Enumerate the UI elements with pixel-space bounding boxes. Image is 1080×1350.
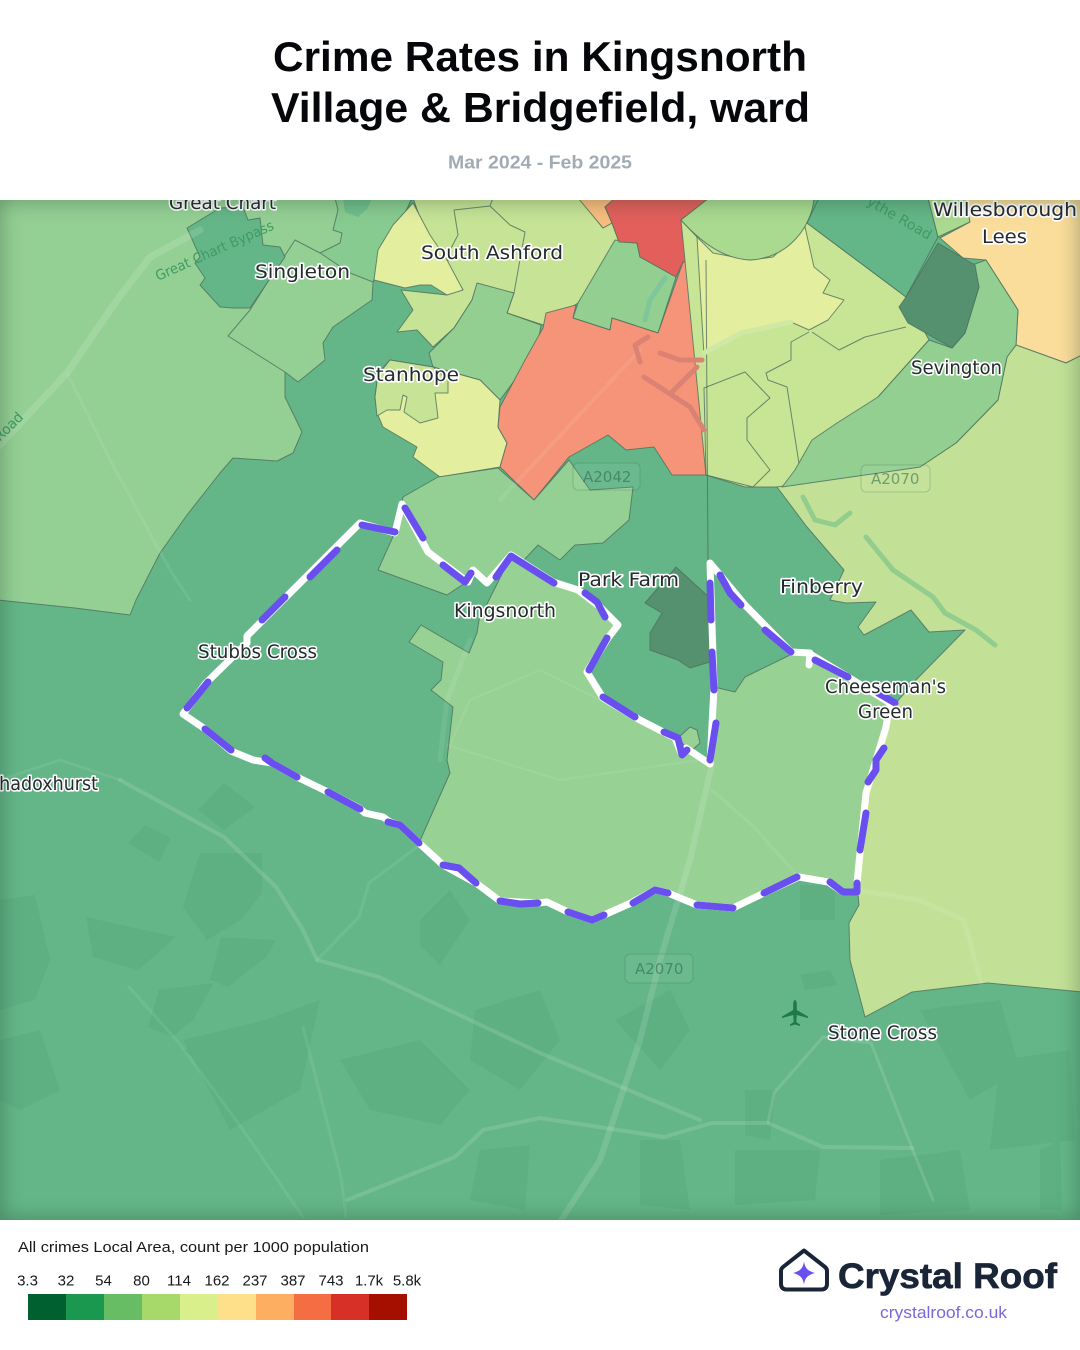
map region: Kingsnorth central light ward bbox=[409, 556, 890, 920]
map region: Great Chart ward bbox=[187, 207, 285, 308]
map detail: roads in peach ward bbox=[635, 337, 704, 430]
label: Lees: Lees bbox=[982, 226, 1027, 248]
map region: South Ashford wards bbox=[397, 198, 619, 347]
logo url: crystalroof.co.uk bbox=[880, 1303, 1008, 1322]
map detail: main roads bbox=[0, 230, 981, 1222]
legend scale values: 1.7k bbox=[355, 1272, 384, 1290]
map region: light green ward north of peach bbox=[573, 240, 676, 333]
road shield: A2070 east: A2070 bbox=[871, 470, 919, 488]
map region: high crime ward, peach bbox=[498, 260, 706, 500]
map region: Park Farm low crime ward bbox=[645, 567, 710, 668]
logo: Crystal Roof bbox=[781, 1250, 1057, 1322]
title bbox=[271, 33, 810, 131]
road name: Hythe Road: ythe Road bbox=[864, 194, 934, 243]
label: Stubbs Cross: Stubbs Cross bbox=[198, 641, 317, 663]
map region: South Ashford pale ward bbox=[374, 203, 463, 295]
road shield: A2070 south bbox=[625, 954, 693, 983]
map region: low crime dark ward, Sevington bbox=[899, 243, 979, 348]
road name: Great Chart Bypass: Great Chart Bypass bbox=[153, 218, 277, 285]
map detail: rivers bbox=[645, 278, 995, 645]
map panel bbox=[0, 192, 1080, 1222]
subtitle: date range: Mar 2024 - Feb 2025 bbox=[448, 152, 632, 172]
legend scale values: 743 bbox=[318, 1272, 344, 1290]
map region: Singleton upper ward bbox=[320, 198, 412, 282]
map region: Stanhope inner ward bbox=[375, 360, 448, 423]
map region: Kingsnorth upper light ward bbox=[378, 460, 633, 595]
label: Sevington: Sevington bbox=[911, 357, 1002, 379]
map region: Sevington ward bbox=[782, 260, 1018, 487]
map region: western ward, light green bbox=[0, 198, 412, 615]
map region: teal blob top bbox=[344, 200, 371, 217]
legend scale values: 387 bbox=[280, 1272, 306, 1290]
legend scale values bbox=[17, 1272, 422, 1290]
road shield: A2070 east bbox=[861, 465, 930, 492]
label: Cheeseman's: Cheeseman's bbox=[825, 676, 946, 698]
map region: Stanhope pale ward bbox=[375, 360, 507, 477]
label: Singleton: Singleton bbox=[255, 261, 350, 283]
label: Finberry: Finberry bbox=[780, 576, 863, 598]
map region: small light ward, top right bbox=[928, 198, 970, 237]
map region: dark strip north-east bbox=[807, 198, 938, 297]
legend scale values: 162 bbox=[204, 1272, 230, 1290]
label: Great Chart: Great Chart bbox=[169, 192, 276, 214]
map edge vignette bbox=[0, 200, 1080, 1220]
title: Village & Bridgefield, ward bbox=[271, 84, 810, 131]
label: Stanhope: Stanhope bbox=[363, 364, 459, 386]
legend bbox=[17, 1239, 422, 1320]
ward boundary route bbox=[183, 504, 895, 920]
label: Park Farm: Park Farm bbox=[578, 569, 679, 591]
logo wordmark: Crystal Roof bbox=[838, 1257, 1057, 1296]
title: Crime Rates in Kingsnorth bbox=[273, 33, 807, 80]
legend scale values: 5.8k bbox=[393, 1272, 422, 1290]
legend scale values: 237 bbox=[242, 1272, 268, 1290]
road shield: A2042 bbox=[573, 463, 640, 490]
label: Kingsnorth: Kingsnorth bbox=[454, 600, 556, 622]
label: Willesborough: Willesborough bbox=[933, 199, 1077, 221]
place labels bbox=[0, 192, 1077, 1044]
map detail: woodland patches bbox=[0, 783, 1075, 1215]
label: Stone Cross: Stone Cross bbox=[828, 1022, 937, 1044]
map region: large eastern yellow-green ward bbox=[777, 345, 1080, 1017]
icon: house with star bbox=[781, 1250, 827, 1290]
map detail: vertical ward line bbox=[706, 260, 708, 560]
legend title: All crimes Local Area, count per 1000 population bbox=[18, 1239, 369, 1256]
map region: small light patch bbox=[680, 726, 700, 749]
map region: pale ward east bbox=[697, 227, 844, 355]
map region: circular north ward bbox=[681, 198, 814, 260]
road shield: A2042: A2042 bbox=[583, 468, 631, 486]
map region: inner lower wards bbox=[704, 372, 770, 487]
map region: high crime ward, red bbox=[605, 198, 709, 277]
boundary: purple dashes bbox=[187, 508, 895, 920]
icon: airport plane bbox=[782, 1000, 808, 1026]
map region: orange ward bbox=[579, 200, 612, 228]
boundary: white base line bbox=[183, 504, 890, 920]
map region: eastern yellow-green background wards bbox=[681, 220, 929, 487]
road shield: A2070 south: A2070 bbox=[635, 960, 683, 978]
legend scale values: 3.3 bbox=[17, 1272, 38, 1290]
legend scale values: 54 bbox=[95, 1272, 112, 1290]
map region: top right low-high yellow ward bbox=[940, 198, 1080, 363]
legend scale values: 114 bbox=[167, 1272, 191, 1290]
label: South Ashford: South Ashford bbox=[421, 242, 563, 264]
legend colour bar bbox=[28, 1294, 407, 1320]
map region: light green ward east of Stanhope bbox=[429, 283, 541, 400]
label: Green: Green bbox=[858, 701, 913, 723]
legend scale values: 32 bbox=[58, 1272, 74, 1290]
legend scale values: 80 bbox=[133, 1272, 150, 1290]
